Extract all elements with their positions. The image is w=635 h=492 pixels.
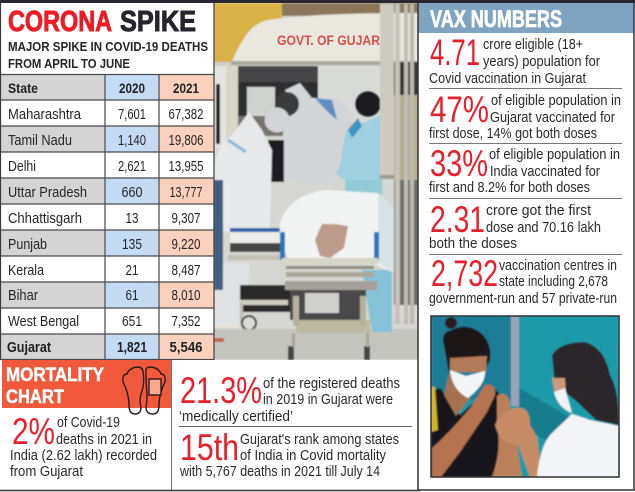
stat: 47 percent: Gujarat vaccinated for <box>490 110 615 126</box>
row: West Bengal: 651 <box>122 314 142 330</box>
stat: 47 percent: first dose, 14% got both doses <box>429 126 597 142</box>
row: Uttar Pradesh: 660 <box>122 185 142 201</box>
middle PPE worker <box>275 83 352 185</box>
blue worker legs <box>362 270 392 332</box>
row: Bihar <box>8 288 200 304</box>
stat: 33 percent <box>429 143 620 196</box>
stat: 33 percent: India vaccinated for <box>490 164 600 180</box>
stat: 4.71 crore: years) population for <box>483 54 600 70</box>
row: Tamil Nadu: 19,806 <box>168 133 204 149</box>
stat: 4.71 crore: crore eligible (18+ <box>483 37 583 53</box>
stat: 21.3 percent <box>179 370 400 425</box>
patient <box>431 385 503 477</box>
row: Kerala: 8,487 <box>172 263 200 279</box>
row: Delhi: 2,621 <box>118 159 146 175</box>
stat: 21.3 percent: of the registered deaths <box>263 376 400 392</box>
stat: 4.71 crore: Covid vaccination in Gujarat <box>429 71 586 87</box>
table: state deaths 2020 vs 2021 <box>0 3 214 360</box>
row: West Bengal: West Bengal <box>8 314 79 330</box>
stat: 21.3 percent: in 2019 in Gujarat were <box>263 392 393 408</box>
row: Bihar: Bihar <box>8 288 38 304</box>
stat: 2,732 centres: state including 2,678 <box>499 274 608 290</box>
row: Maharashtra: 67,382 <box>168 107 204 123</box>
stat: 15th rank: with 5,767 deaths in 2021 till July 14 <box>179 464 380 480</box>
stat: 33 percent: of eligible population in <box>489 147 620 163</box>
stat: 4.71 crore <box>429 32 600 87</box>
heading: mortality chart: CHART <box>6 386 64 408</box>
stat: 33 percent: 33% <box>430 143 488 184</box>
front stretcher <box>280 232 379 360</box>
row: Bihar: 8,010 <box>172 288 200 304</box>
row: Kerala: 21 <box>126 263 138 279</box>
subtitle <box>8 40 208 71</box>
row: Tamil Nadu <box>8 133 204 149</box>
row: Maharashtra: Maharashtra <box>8 107 82 123</box>
row: Chhattisgarh: Chhattisgarh <box>8 211 82 227</box>
stat: 15th rank <box>179 427 399 480</box>
nurse <box>495 408 542 477</box>
stat: 2 percent: India (2.62 lakh) recorded <box>10 448 157 464</box>
title: Corona Spike: CORONA <box>8 6 112 38</box>
row: Bihar: 61 <box>126 288 138 304</box>
top border bar <box>0 0 635 3</box>
icon: feet with toe tag <box>123 367 165 414</box>
row: Chhattisgarh: 9,307 <box>172 211 200 227</box>
table header row: 2020 <box>119 80 145 96</box>
row: Punjab <box>8 237 200 253</box>
white body bag <box>280 190 402 272</box>
title: Corona Spike: SPIKE <box>120 6 196 38</box>
row: Maharashtra: 7,601 <box>118 107 146 123</box>
central photo: ambulance and stretcher <box>214 3 418 360</box>
stat: 2 percent: of Covid-19 <box>57 415 120 431</box>
panel: vax numbers <box>418 3 634 490</box>
row: Tamil Nadu: 1,140 <box>118 133 146 149</box>
row: Kerala <box>8 263 200 279</box>
row: Gujarat: 5,546 <box>170 340 202 356</box>
panel: table header block <box>0 3 214 74</box>
row: West Bengal: 7,352 <box>172 314 200 330</box>
stat: 2.31 crore: crore got the first <box>486 203 591 219</box>
row: Uttar Pradesh: Uttar Pradesh <box>8 185 87 201</box>
stat: 15th rank: Gujarat's rank among states <box>240 432 399 448</box>
stat: 2.31 crore: 2.31 <box>430 199 485 240</box>
photo: vaccination <box>431 316 619 477</box>
row: Delhi: 13,955 <box>168 159 204 175</box>
stat: 15th rank: of India in Covid mortality <box>240 448 387 464</box>
heading: mortality chart: MORTALITY <box>6 364 104 386</box>
gate posts <box>380 4 418 324</box>
row: Chhattisgarh <box>8 211 200 227</box>
row: Chhattisgarh: 13 <box>126 211 138 227</box>
subtitle: MAJOR SPIKE IN COVID-19 DEATHS <box>8 40 208 54</box>
stat: 33 percent: first and 8.2% for both doses <box>429 180 590 196</box>
row: West Bengal <box>8 314 200 330</box>
row: Uttar Pradesh: 13,777 <box>170 185 202 201</box>
stat: 2.31 crore: dose and 70.16 lakh <box>486 220 601 236</box>
left PPE worker <box>214 108 290 326</box>
stat: 2 percent: from Gujarat <box>10 464 83 480</box>
stat: 2,732 centres <box>429 253 617 307</box>
row: Punjab: Punjab <box>8 237 47 253</box>
stat: 47 percent <box>429 89 621 142</box>
rear stretcher <box>228 228 290 330</box>
stat: 21.3 percent: 21.3% <box>180 370 262 411</box>
stat: 2 percent: 2% <box>12 411 55 452</box>
title: Corona Spike <box>8 6 196 38</box>
row: Kerala: Kerala <box>8 263 45 279</box>
stat: 2 percent: deaths in 2021 in <box>56 432 152 448</box>
row: Gujarat: 1,821 <box>117 340 147 356</box>
heading: vax numbers: VAX NUMBERS <box>430 6 562 33</box>
stat: 15th rank: 15th <box>180 427 239 468</box>
row: Delhi <box>8 159 204 175</box>
stat: 2,732 centres: 2,732 <box>431 253 498 294</box>
row: Gujarat: Gujarat <box>7 340 51 356</box>
row: Tamil Nadu: Tamil Nadu <box>8 133 72 149</box>
row: Uttar Pradesh <box>8 185 202 201</box>
stat: 47 percent: of eligible population in <box>491 93 621 109</box>
table header row: State <box>8 80 38 96</box>
table header row: 2021 <box>173 80 199 96</box>
heading: mortality chart <box>6 364 104 408</box>
row: Punjab: 135 <box>122 237 142 253</box>
row: Punjab: 9,220 <box>172 237 200 253</box>
row: Delhi: Delhi <box>8 159 36 175</box>
blue-clad worker <box>330 91 382 200</box>
stat: 2.31 crore <box>429 199 601 252</box>
panel: mortality chart <box>0 360 420 491</box>
stat: 4.71 crore: 4.71 <box>430 32 480 73</box>
row: Maharashtra <box>8 107 204 123</box>
stat: 21.3 percent: ‘medically certified’ <box>179 409 293 425</box>
subtitle: FROM APRIL TO JUNE <box>8 57 130 71</box>
stat: 2,732 centres: vaccination centres in <box>499 258 617 274</box>
stat: 2.31 crore: both the doses <box>429 236 517 252</box>
row: Gujarat <box>7 340 202 356</box>
ambulance lettering: GOVT. OF GUJAR <box>277 33 380 48</box>
stat: 47 percent: 47% <box>430 89 489 130</box>
stat: 2 percent <box>10 411 157 480</box>
table header row <box>8 80 199 96</box>
